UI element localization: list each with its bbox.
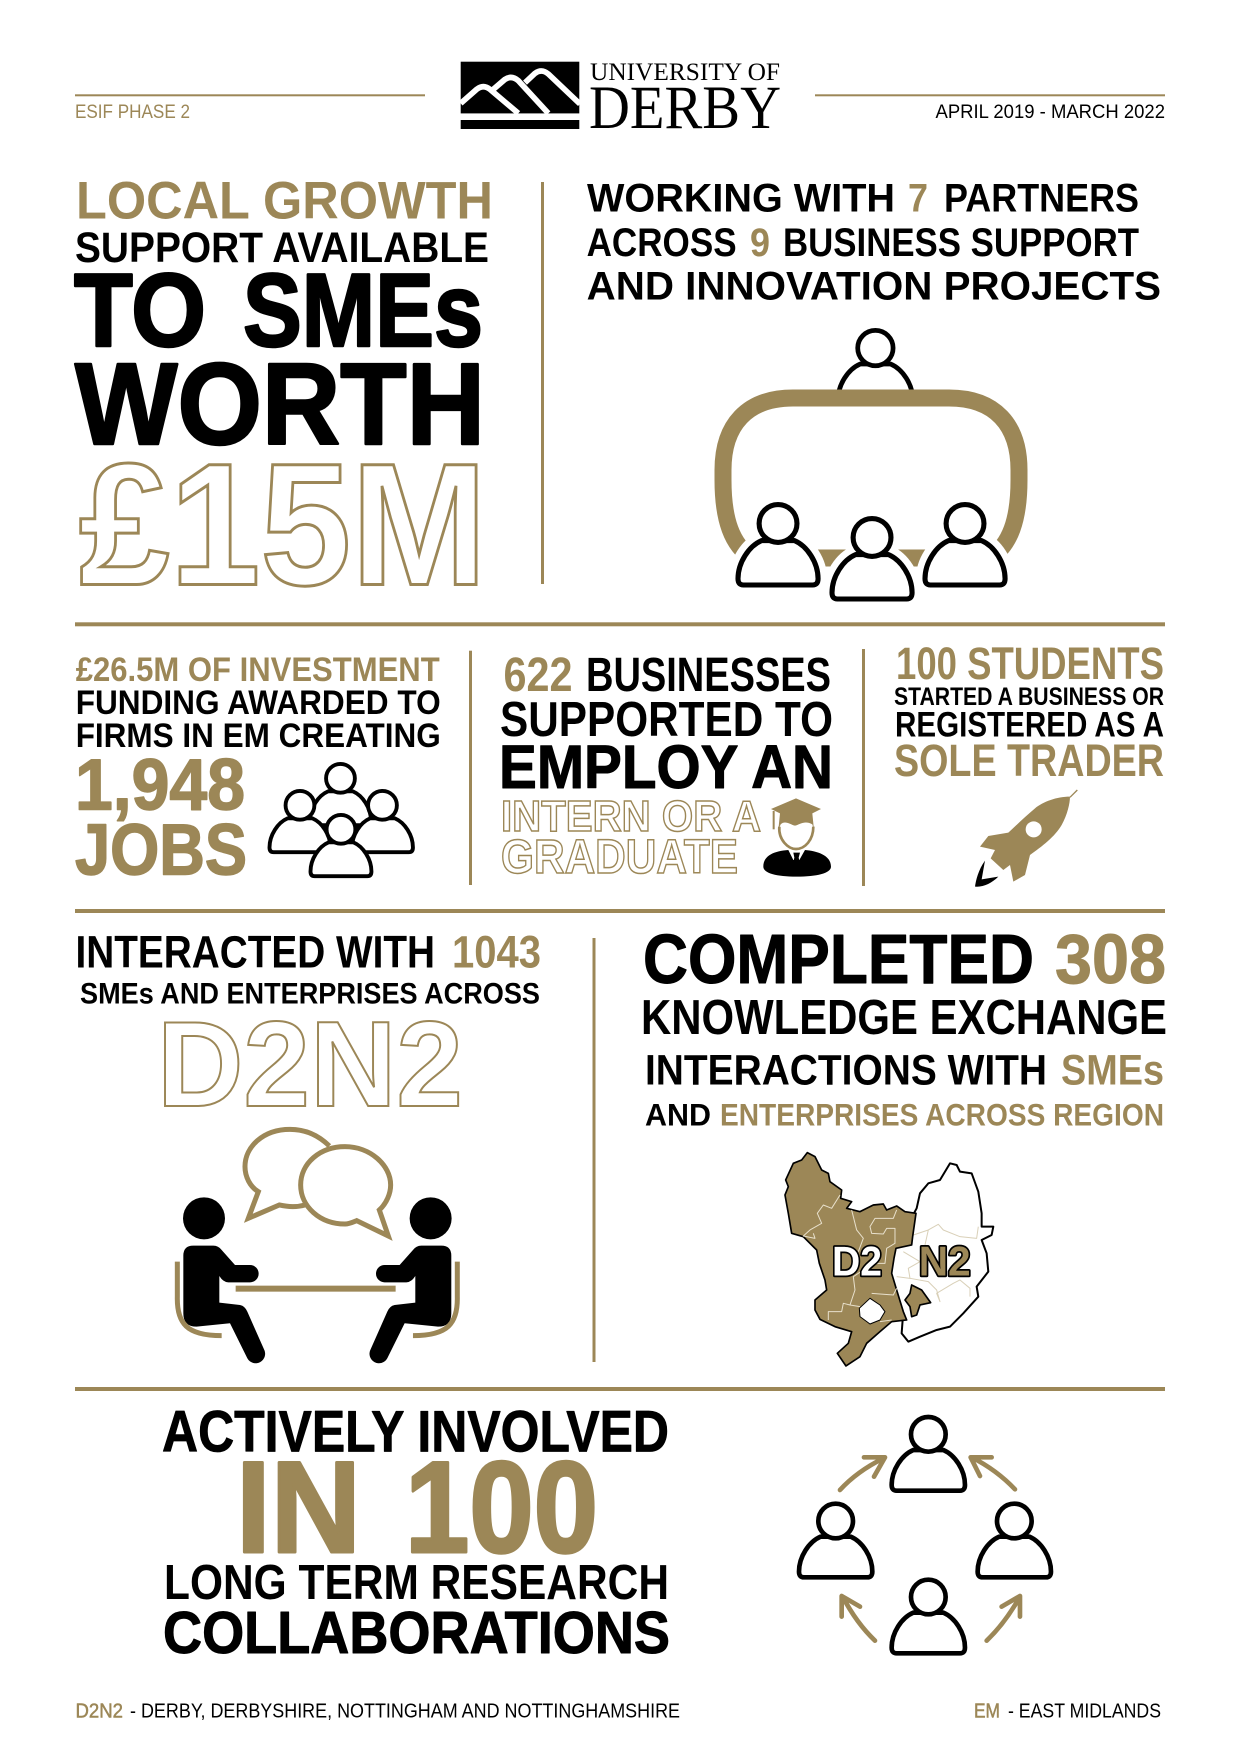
text: knowledge exchange interactions: AND	[645, 1096, 711, 1132]
headline: local growth worth 15M: £15M	[79, 426, 487, 622]
text: students: REGISTERED AS A	[895, 706, 1164, 744]
text: businesses supported	[499, 649, 833, 884]
logo: University of Derby	[461, 57, 781, 142]
footer: EM definition: - EAST MIDLANDS	[1008, 1700, 1161, 1722]
text: businesses supported: INTERN OR A	[501, 792, 761, 841]
icon: people around a table	[723, 330, 1019, 599]
text: knowledge exchange interactions: KNOWLEDGE EXCHANGE	[641, 991, 1167, 1045]
footer: D2N2 definition: - DERBY, DERBYSHIRE, NOTTINGHAM AND NOTTINGHAMSHIRE	[130, 1700, 680, 1722]
map: D2N2 region	[785, 1153, 993, 1366]
text: businesses supported: EMPLOY AN	[499, 733, 833, 801]
headline: local growth worth 15M: SMEs	[243, 253, 483, 369]
text: research collaborations: 100	[405, 1434, 598, 1580]
text: interacted with SMEs across D2N2	[76, 927, 541, 1132]
text: students: SOLE TRADER	[894, 735, 1164, 786]
text: students: STARTED A BUSINESS OR	[894, 683, 1164, 711]
text: partners and projects: 7	[908, 176, 928, 220]
text: knowledge exchange interactions: ENTERPRISES ACROSS REGION	[720, 1096, 1164, 1132]
text: investment and jobs	[75, 651, 441, 890]
icon: two people talking at a table	[177, 1129, 457, 1363]
text: knowledge exchange interactions: COMPLETED	[643, 920, 1034, 998]
icon: circle of collaborators with arrows	[799, 1417, 1051, 1653]
text: businesses supported: 622	[504, 649, 572, 702]
text: partners and projects: WORKING WITH	[587, 176, 895, 220]
text: research collaborations: LONG TERM RESEARCH	[164, 1555, 669, 1610]
text: research collaborations: COLLABORATIONS	[163, 1600, 670, 1666]
footer: EM definition: EM	[974, 1700, 1000, 1722]
header: left rule and programme label: ESIF PHASE 2	[75, 101, 190, 123]
logo: University of Derby: DERBY	[589, 75, 781, 142]
map: D2N2 region: D2	[832, 1238, 882, 1284]
headline: local growth worth 15M: WORTH	[75, 339, 485, 469]
text: investment and jobs: 1,948	[75, 746, 245, 826]
text: knowledge exchange interactions: SMEs	[1061, 1046, 1164, 1094]
text: investment and jobs: £26.5M OF INVESTMENT	[76, 651, 440, 689]
headline: local growth worth 15M: LOCAL GROWTH	[76, 172, 493, 230]
text: interacted with SMEs across D2N2: INTERACTED WITH	[76, 927, 435, 978]
headline: local growth worth 15M: TO	[74, 253, 206, 369]
icon: graduate	[763, 798, 831, 877]
text: partners and projects: ACROSS	[587, 221, 737, 265]
logo: University of Derby: UNIVERSITY OF	[590, 57, 780, 86]
text: research collaborations	[162, 1400, 670, 1666]
text: interacted with SMEs across D2N2: SMEs AND ENTERPRISES ACROSS	[80, 977, 540, 1010]
text: partners and projects: BUSINESS SUPPORT	[783, 221, 1139, 265]
text: knowledge exchange interactions	[641, 920, 1167, 1132]
text: research collaborations: IN	[236, 1434, 361, 1580]
text: investment and jobs: JOBS	[75, 810, 247, 890]
map: D2N2 region: N2	[919, 1238, 971, 1284]
text: businesses supported: SUPPORTED TO	[500, 693, 833, 747]
text: partners and projects: PARTNERS	[944, 176, 1139, 220]
text: interacted with SMEs across D2N2: 1043	[452, 927, 541, 978]
text: partners and projects	[587, 176, 1161, 308]
icon: rocket	[975, 790, 1077, 887]
header: right rule and dates: APRIL 2019 - MARCH 2022	[936, 101, 1165, 123]
text: investment and jobs: FIRMS IN EM CREATING	[76, 717, 441, 755]
text: partners and projects: AND INNOVATION PROJECTS	[587, 264, 1161, 308]
text: knowledge exchange interactions: 308	[1055, 920, 1166, 998]
text: partners and projects: 9	[750, 221, 770, 265]
text: students: 100 STUDENTS	[896, 638, 1164, 689]
text: investment and jobs: FUNDING AWARDED TO	[76, 684, 441, 722]
text: interacted with SMEs across D2N2: D2N2	[157, 996, 463, 1132]
text: businesses supported: BUSINESSES	[586, 649, 831, 702]
headline: local growth worth 15M: SUPPORT AVAILABLE	[75, 224, 489, 272]
text: knowledge exchange interactions: INTERACTIONS WITH	[645, 1046, 1047, 1094]
footer: D2N2 definition: D2N2	[76, 1700, 123, 1722]
headline: local growth worth 15M	[74, 172, 493, 622]
text: students	[894, 638, 1164, 786]
icon: group of people	[270, 764, 413, 876]
text: research collaborations: ACTIVELY INVOLVED	[162, 1400, 669, 1464]
text: businesses supported: GRADUATE	[501, 831, 738, 884]
